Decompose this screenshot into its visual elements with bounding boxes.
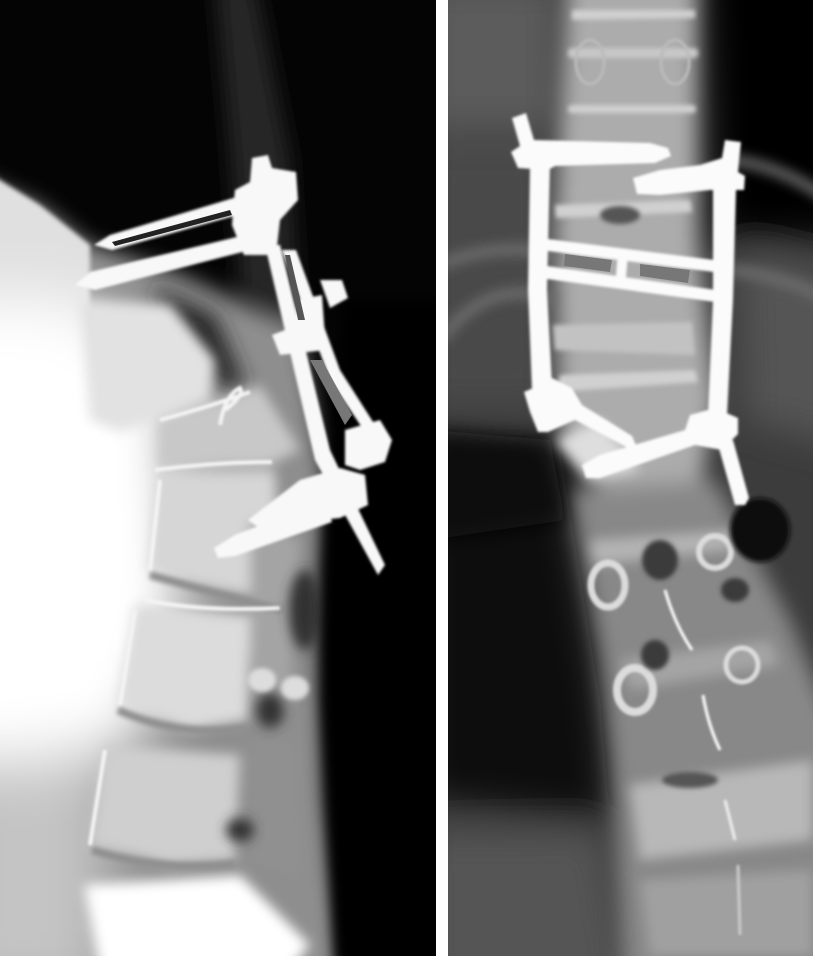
dark lower right	[314, 442, 358, 956]
shadow below screws	[150, 285, 245, 390]
hardware: lateral construct	[75, 155, 392, 575]
spine column	[555, 0, 813, 956]
dark flanks	[420, 0, 813, 956]
divider: white gap	[436, 0, 448, 956]
ribs	[440, 160, 813, 340]
vertebrae	[80, 300, 310, 956]
lower left shadow blend	[448, 421, 575, 524]
dark gaps beside spine	[226, 570, 321, 842]
panel: lateral radiograph	[0, 0, 446, 956]
dark openings in column	[600, 206, 790, 788]
panel: frontal radiograph	[420, 0, 813, 956]
rod gaps	[112, 210, 352, 425]
bright abdomen	[0, 300, 185, 956]
hardware: posterior construct	[511, 113, 749, 505]
window gaps between cross bars	[564, 254, 690, 283]
lateral edge	[0, 176, 94, 351]
soft tissue haze	[0, 0, 345, 956]
discs	[92, 575, 282, 866]
vertebra highlights	[553, 10, 698, 392]
